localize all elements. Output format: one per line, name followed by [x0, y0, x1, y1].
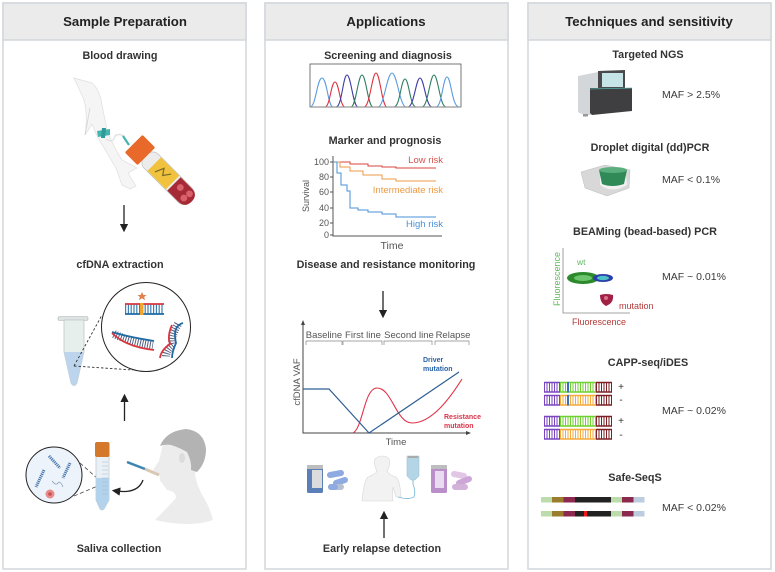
phase labels: Second line	[384, 330, 434, 341]
panel header bar	[265, 3, 508, 40]
subheading: blood drawing: Blood drawing	[83, 50, 157, 62]
heading: sample preparation: Sample Preparation	[63, 14, 187, 29]
strand pair 1 minus	[544, 395, 612, 406]
strand signs: +	[618, 382, 624, 393]
y axis tick labels: 100	[314, 157, 329, 167]
panel frame	[265, 3, 508, 569]
icon: blue drug bottle	[307, 465, 323, 493]
y axis title: cfDNA VAF	[292, 358, 303, 406]
label: driver mutation	[423, 357, 453, 373]
subheading: disease and resistance monitoring: Disease and resistance monitoring	[297, 259, 475, 271]
cluster: mutation	[600, 294, 613, 306]
subheading: marker and prognosis: Marker and prognosis	[329, 135, 441, 147]
icon: NGS sequencer	[578, 70, 632, 116]
y axis tick labels: 20	[319, 218, 329, 228]
icon: arm with tourniquet	[74, 78, 137, 189]
icon: person with swab	[153, 429, 213, 524]
label: driver mutation: mutation	[423, 366, 453, 373]
subheading: CAPP-seq/iDES: CAPP-seq/iDES	[608, 357, 688, 369]
y axis title: Fluorescence	[552, 252, 562, 306]
icon: DNA fragment left	[112, 332, 154, 350]
icon: blood collection tube	[125, 135, 200, 210]
subheading: early relapse detection: Early relapse detection	[323, 543, 441, 555]
label: high risk: High risk	[406, 219, 443, 230]
arrow: up from early relapse	[383, 515, 385, 538]
panel frame	[3, 3, 246, 569]
label: MAF targeted NGS: MAF > 2.5%	[662, 89, 720, 101]
icon: ddPCR instrument	[581, 165, 630, 196]
curve: driver mutation	[303, 372, 459, 433]
label: resistance mutation: Resistance	[444, 414, 481, 421]
icon: blue pills	[330, 473, 345, 487]
heading: techniques and sensitivity: Techniques and sensitivity	[565, 14, 733, 29]
icon: patient figure	[362, 456, 401, 501]
label: MAF BEAMing: MAF ~ 0.01%	[662, 271, 726, 283]
label: MAF Safe-SeqS: MAF < 0.02%	[662, 502, 726, 514]
axes	[303, 323, 468, 433]
strand pair 2 minus	[544, 430, 612, 439]
subheading: droplet digital PCR: Droplet digital (dd)PCR	[591, 142, 710, 154]
label: low risk: Low risk	[408, 155, 443, 166]
subheading: cfDNA extraction: cfDNA extraction	[76, 259, 164, 271]
arrow: curved to tube	[116, 480, 143, 492]
strand pair 1 plus	[544, 382, 612, 392]
panel header bar	[3, 3, 246, 40]
label: resistance mutation: mutation	[444, 423, 474, 430]
label: driver mutation: Driver	[423, 357, 444, 364]
subheading: targeted NGS: Targeted NGS	[612, 49, 684, 61]
label: mutation: mutation	[619, 301, 654, 311]
curve: high risk	[333, 162, 436, 217]
phase labels: First line	[345, 330, 381, 341]
diagram: Safe-SeqS reads	[541, 497, 644, 516]
read 1	[541, 497, 644, 502]
icon: mutated DNA fragment	[125, 292, 164, 315]
strand signs	[618, 382, 624, 441]
icon: DNA fragment right	[160, 323, 183, 358]
phase labels: Baseline	[306, 330, 342, 341]
arrow: saliva to extraction	[124, 398, 126, 421]
heading: applications: Applications	[346, 14, 426, 29]
arrow: blood to extraction	[123, 205, 125, 228]
y axis tick labels: 40	[319, 203, 329, 213]
curve: intermediate risk	[333, 162, 436, 181]
label: MAF CAPP-seq: MAF ~ 0.02%	[662, 405, 726, 417]
icon: IV drip	[398, 456, 419, 498]
strand pair 2 plus	[544, 416, 612, 426]
icon: microcentrifuge tube	[58, 316, 88, 386]
subheading: BEAMing PCR: BEAMing (bead-based) PCR	[573, 226, 717, 238]
phase labels	[306, 330, 470, 341]
label: wt: wt	[576, 257, 586, 267]
y axis title: Survival	[301, 180, 311, 212]
cluster: double positive	[593, 274, 613, 282]
chart: survival curves	[301, 155, 443, 252]
cluster: wild type	[567, 272, 599, 284]
x axis title: Fluorescence	[572, 317, 626, 327]
y axis tick labels	[314, 157, 329, 240]
subheading: screening and diagnosis: Screening and diagnosis	[324, 50, 452, 62]
chart: sequencing chromatogram	[310, 64, 461, 107]
strand signs: +	[618, 416, 624, 427]
axes	[330, 156, 442, 236]
label: resistance mutation	[444, 414, 481, 430]
curve: resistance mutation	[353, 379, 462, 433]
chart: BEAMing scatter plot	[552, 248, 654, 327]
strand signs: -	[619, 395, 623, 406]
panel: sample preparation	[3, 3, 246, 569]
label: intermediate risk: Intermediate risk	[373, 185, 443, 196]
phase brackets	[306, 341, 469, 345]
subheading: saliva collection: Saliva collection	[77, 543, 161, 555]
phase labels: Relapse	[436, 330, 470, 341]
label: MAF ddPCR: MAF < 0.1%	[662, 174, 720, 186]
callout: DNA fragments circle	[102, 282, 190, 372]
icon: purple pills	[454, 474, 469, 487]
x axis title: Time	[386, 437, 406, 448]
y axis tick labels: 80	[319, 172, 329, 182]
curve: low risk	[333, 162, 436, 168]
y axis tick labels: 60	[319, 187, 329, 197]
magnifier dashes saliva	[74, 463, 100, 496]
magnifier dashed lines	[74, 315, 133, 370]
icon: swab	[127, 462, 159, 475]
icon: saliva tube	[95, 442, 110, 510]
icon: purple drug bottle	[431, 465, 447, 493]
panel: applications	[265, 3, 508, 569]
y axis tick labels: 0	[324, 230, 329, 240]
arrow: down to monitoring chart	[382, 291, 384, 314]
diagram: CAPP-seq reads	[544, 382, 612, 439]
panel: techniques and sensitivity	[528, 3, 771, 569]
x axis title: Time	[381, 240, 404, 252]
panel frame	[528, 3, 771, 569]
strand signs: -	[619, 430, 623, 441]
panel header bar	[528, 3, 771, 40]
callout: saliva contents circle	[26, 447, 82, 503]
chart: cfDNA VAF over time	[292, 320, 481, 448]
read 2	[541, 511, 644, 516]
subheading: Safe-SeqS: Safe-SeqS	[608, 472, 662, 484]
